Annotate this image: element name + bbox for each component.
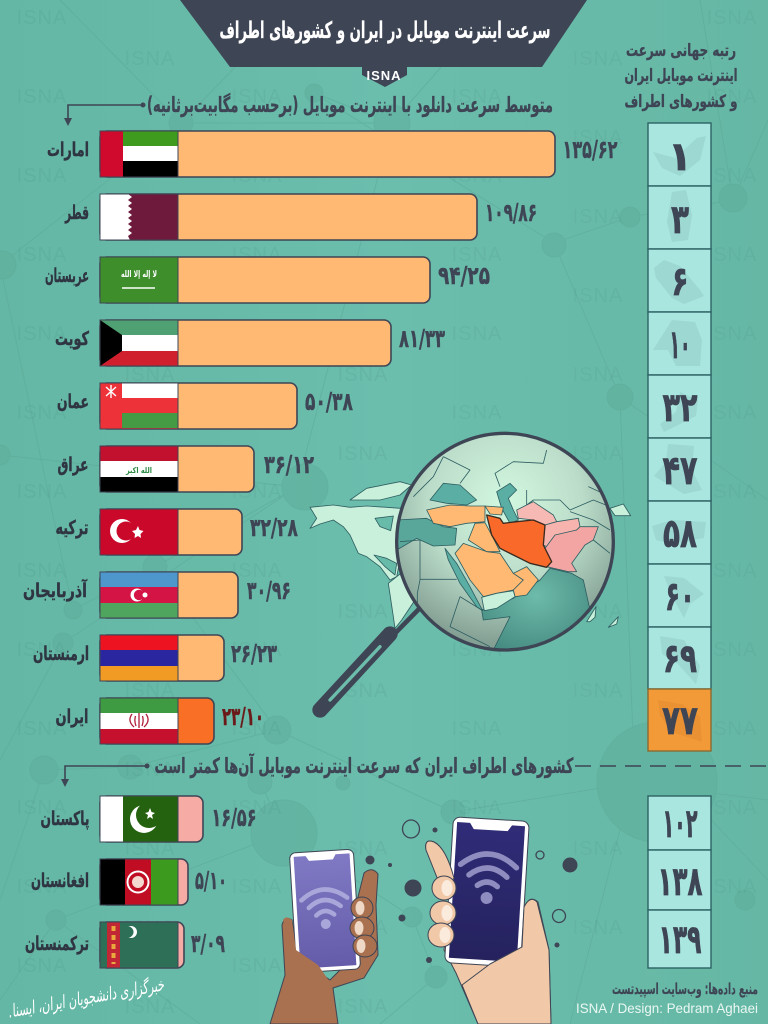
ISNA watermarks: ISNA: [232, 797, 282, 819]
ISNA watermarks: ISNA: [17, 955, 67, 977]
ISNA watermarks: ISNA: [338, 206, 388, 228]
ISNA watermarks: ISNA: [338, 838, 388, 860]
row: Azerbaijan: آذربایجان: [23, 578, 87, 602]
ISNA watermarks: ISNA: [338, 443, 388, 465]
row: Afghanistan: ۵/۱۰: [195, 866, 227, 895]
ISNA watermarks: ISNA: [125, 522, 175, 544]
ISNA watermarks: ISNA: [707, 165, 757, 187]
row: Iran: [56, 698, 264, 744]
row: Pakistan: [40, 796, 256, 842]
row: UAE: [47, 131, 618, 177]
rank: Armenia: ۶۹: [663, 636, 697, 682]
ISNA watermarks: ISNA: [573, 917, 623, 939]
ISNA watermarks: ISNA: [707, 7, 757, 29]
ISNA watermarks: ISNA: [452, 86, 502, 108]
ISNA watermarks: ISNA: [573, 48, 623, 70]
rank: Afghanistan: [648, 850, 711, 910]
ISNA watermarks: ISNA: [232, 244, 282, 266]
ISNA watermarks: ISNA: [452, 955, 502, 977]
decorative dots: [366, 820, 578, 963]
row: Iraq: [58, 446, 314, 492]
source note: ISNA / Design: Pedram Aghaei: [576, 1000, 758, 1016]
row: Turkmenistan: [25, 922, 225, 968]
ISNA watermarks: ISNA: [452, 165, 502, 187]
bar chart: slower countries: [25, 796, 256, 968]
ISNA watermarks: ISNA: [125, 48, 175, 70]
ISNA watermarks: ISNA: [17, 560, 67, 582]
ISNA watermarks: ISNA: [125, 206, 175, 228]
ISNA watermarks: ISNA: [707, 560, 757, 582]
ISNA watermarks: ISNA: [125, 680, 175, 702]
row: Kuwait: کویت: [55, 328, 90, 350]
row: Kuwait: [55, 320, 445, 366]
ISNA watermarks: ISNA: [125, 443, 175, 465]
rank: Kuwait: ۱۰: [670, 322, 690, 368]
row: Saudi Arabia: ۹۴/۲۵: [438, 261, 490, 290]
rank: Qatar: [648, 186, 711, 249]
ISNA watermarks: ISNA: [338, 917, 388, 939]
row: Qatar: ۱۰۹/۸۶: [485, 198, 537, 227]
heading: average download speed: [64, 92, 553, 126]
left hand and phone: [270, 849, 378, 1024]
bar chart: faster countries: [23, 131, 618, 744]
ISNA watermarks: ISNA: [125, 838, 175, 860]
ISNA watermarks: ISNA: [573, 285, 623, 307]
ISNA watermarks: ISNA: [17, 244, 67, 266]
ISNA watermarks: ISNA: [573, 838, 623, 860]
rank: UAE: [648, 123, 711, 186]
row: Oman: عمان: [57, 391, 89, 413]
rank: Iraq: ۴۷: [662, 448, 698, 494]
ISNA watermarks: ISNA: [338, 601, 388, 623]
row: Qatar: قطر: [64, 202, 89, 224]
magnifier handle: [320, 609, 419, 710]
row: Iran: ۲۳/۱۰: [222, 702, 264, 731]
ISNA watermarks: ISNA: [232, 86, 282, 108]
ISNA watermarks: ISNA: [125, 285, 175, 307]
ISNA watermarks: ISNA: [17, 481, 67, 503]
ISNA watermarks: ISNA: [707, 639, 757, 661]
rank: Azerbaijan: ۶۰: [665, 574, 695, 620]
rank: Iran: ۷۷: [662, 698, 698, 744]
row: Pakistan: پاکستان: [40, 808, 90, 830]
ISNA watermarks: ISNA: [17, 86, 67, 108]
ISNA watermarks: ISNA: [452, 323, 502, 345]
ISNA watermarks: ISNA: [125, 364, 175, 386]
row: UAE: امارات: [47, 139, 89, 161]
heading: neighbours with slower internet: [61, 753, 768, 787]
row: Armenia: ۲۶/۲۳: [231, 639, 277, 668]
ISNA watermarks: ISNA: [452, 244, 502, 266]
row: Afghanistan: [31, 859, 227, 905]
ISNA watermarks: ISNA: [338, 127, 388, 149]
ISNA watermarks: ISNA: [125, 996, 175, 1018]
ISNA watermarks: ISNA: [17, 7, 67, 29]
row: Turkmenistan: ترکمنستان: [25, 933, 89, 955]
rank: UAE: ۱: [668, 134, 692, 180]
ISNA watermarks: ISNA: [232, 639, 282, 661]
row: Azerbaijan: ۳۰/۹۶: [247, 576, 291, 605]
ISNA watermarks: ISNA: [232, 560, 282, 582]
ISNA watermarks: ISNA: [17, 797, 67, 819]
ISNA watermarks: ISNA: [125, 601, 175, 623]
ISNA watermarks: ISNA: [573, 680, 623, 702]
ISNA watermarks: ISNA: [452, 718, 502, 740]
rank: Saudi Arabia: ۶: [672, 259, 688, 305]
heading: global rank: [624, 41, 738, 112]
logo: ISNA news agency: خبرگزاری دانشجویان ایران، ایسنا.: [6, 973, 166, 1023]
rank: Kuwait: [648, 312, 711, 375]
row: Pakistan: ۱۶/۵۶: [212, 803, 256, 832]
map and magnifying glass: [310, 433, 631, 710]
rank: Turkey: [648, 501, 711, 564]
ISNA watermarks: ISNA: [17, 639, 67, 661]
ISNA watermarks: ISNA: [338, 680, 388, 702]
row: Afghanistan: افغانستان: [31, 870, 89, 892]
row: Turkey: [56, 509, 298, 555]
row: Iraq: عراق: [58, 454, 88, 476]
ISNA watermarks: ISNA: [17, 165, 67, 187]
rank: Turkmenistan: ۱۳۹: [658, 917, 702, 963]
source note: [576, 980, 758, 1016]
ISNA watermarks: ISNA: [452, 402, 502, 424]
ISNA watermarks: ISNA: [232, 876, 282, 898]
row: Iran: ایران: [56, 706, 88, 728]
rank: Afghanistan: ۱۳۸: [658, 859, 702, 905]
ISNA watermarks: ISNA: [17, 718, 67, 740]
rank: Iran: [648, 689, 711, 751]
ISNA watermarks: ISNA: [232, 402, 282, 424]
ISNA watermarks: ISNA: [125, 917, 175, 939]
rank: Pakistan: [648, 796, 711, 850]
ISNA watermarks: ISNA: [573, 443, 623, 465]
rank: Oman: ۳۲: [662, 385, 698, 431]
ISNA watermarks: ISNA: [573, 206, 623, 228]
world map: [310, 482, 631, 628]
ISNA watermarks: ISNA: [707, 323, 757, 345]
ISNA watermarks: ISNA: [707, 718, 757, 740]
rank: Qatar: ۳: [671, 197, 689, 243]
ISNA watermarks: ISNA: [452, 876, 502, 898]
row: Armenia: ارمنستان: [33, 643, 89, 665]
illustration: hands holding phones: [270, 817, 578, 1024]
row: Saudi Arabia: [45, 257, 490, 303]
rank: Pakistan: ۱۰۲: [662, 801, 698, 847]
ISNA watermarks: ISNA: [338, 285, 388, 307]
row: Kuwait: ۸۱/۳۳: [399, 324, 445, 353]
rank column: lower ranks: [648, 796, 711, 968]
ISNA watermarks: ISNA: [573, 127, 623, 149]
row: UAE: ۱۳۵/۶۲: [562, 135, 618, 164]
row: Turkmenistan: ۳/۰۹: [191, 929, 225, 958]
row: Turkey: ترکیه: [56, 517, 88, 539]
ISNA watermarks: ISNA: [125, 127, 175, 149]
ISNA watermarks: ISNA: [707, 244, 757, 266]
rank column: top ranks: [648, 123, 711, 751]
ISNA watermarks: ISNA: [17, 402, 67, 424]
ISNA watermarks: ISNA: [17, 323, 67, 345]
ISNA watermarks: ISNA: [232, 481, 282, 503]
ISNA watermarks: ISNA: [125, 759, 175, 781]
ISNA watermarks: ISNA: [707, 797, 757, 819]
ISNA watermarks: ISNA: [707, 402, 757, 424]
right hand and phone: [426, 817, 551, 1024]
ISNA watermarks: ISNA: [452, 639, 502, 661]
rank: Oman: [648, 375, 711, 438]
rank: Azerbaijan: [648, 564, 711, 627]
row: Oman: ۵۰/۳۸: [305, 387, 353, 416]
row: Iraq: الله اکبر: [125, 466, 152, 475]
ISNA watermarks: ISNA: [232, 323, 282, 345]
row: Iraq: ۳۶/۱۲: [264, 450, 314, 479]
row: Armenia: [33, 635, 277, 681]
title banner: ISNA: [366, 68, 402, 83]
ISNA watermarks: ISNA: [232, 165, 282, 187]
row: Oman: [57, 383, 353, 429]
rank: Iraq: [648, 438, 711, 501]
rank: Turkmenistan: [648, 910, 711, 968]
ISNA watermarks: ISNA: [573, 364, 623, 386]
magnifier lens with Middle East map: [397, 433, 613, 660]
ISNA watermarks: ISNA: [573, 601, 623, 623]
ISNA watermarks: ISNA: [232, 955, 282, 977]
row: Saudi Arabia: لا إله إلا الله: [121, 270, 157, 280]
ISNA watermarks: ISNA: [452, 797, 502, 819]
ISNA watermarks: ISNA: [707, 86, 757, 108]
row: Qatar: [64, 194, 537, 240]
rank: Armenia: [648, 627, 711, 689]
ISNA watermarks: ISNA: [707, 876, 757, 898]
ISNA watermarks: ISNA: [338, 364, 388, 386]
ISNA watermarks: ISNA: [707, 481, 757, 503]
ISNA watermarks: ISNA: [232, 718, 282, 740]
title banner: [180, 0, 587, 87]
ISNA watermarks: ISNA: [17, 876, 67, 898]
row: Turkey: ۳۲/۲۸: [250, 513, 298, 542]
rank: Saudi Arabia: [648, 249, 711, 312]
row: Saudi Arabia: عربستان: [45, 265, 89, 287]
row: Azerbaijan: [23, 572, 291, 618]
rank: Turkey: ۵۸: [663, 511, 697, 557]
ISNA watermarks: ISNA: [338, 996, 388, 1018]
